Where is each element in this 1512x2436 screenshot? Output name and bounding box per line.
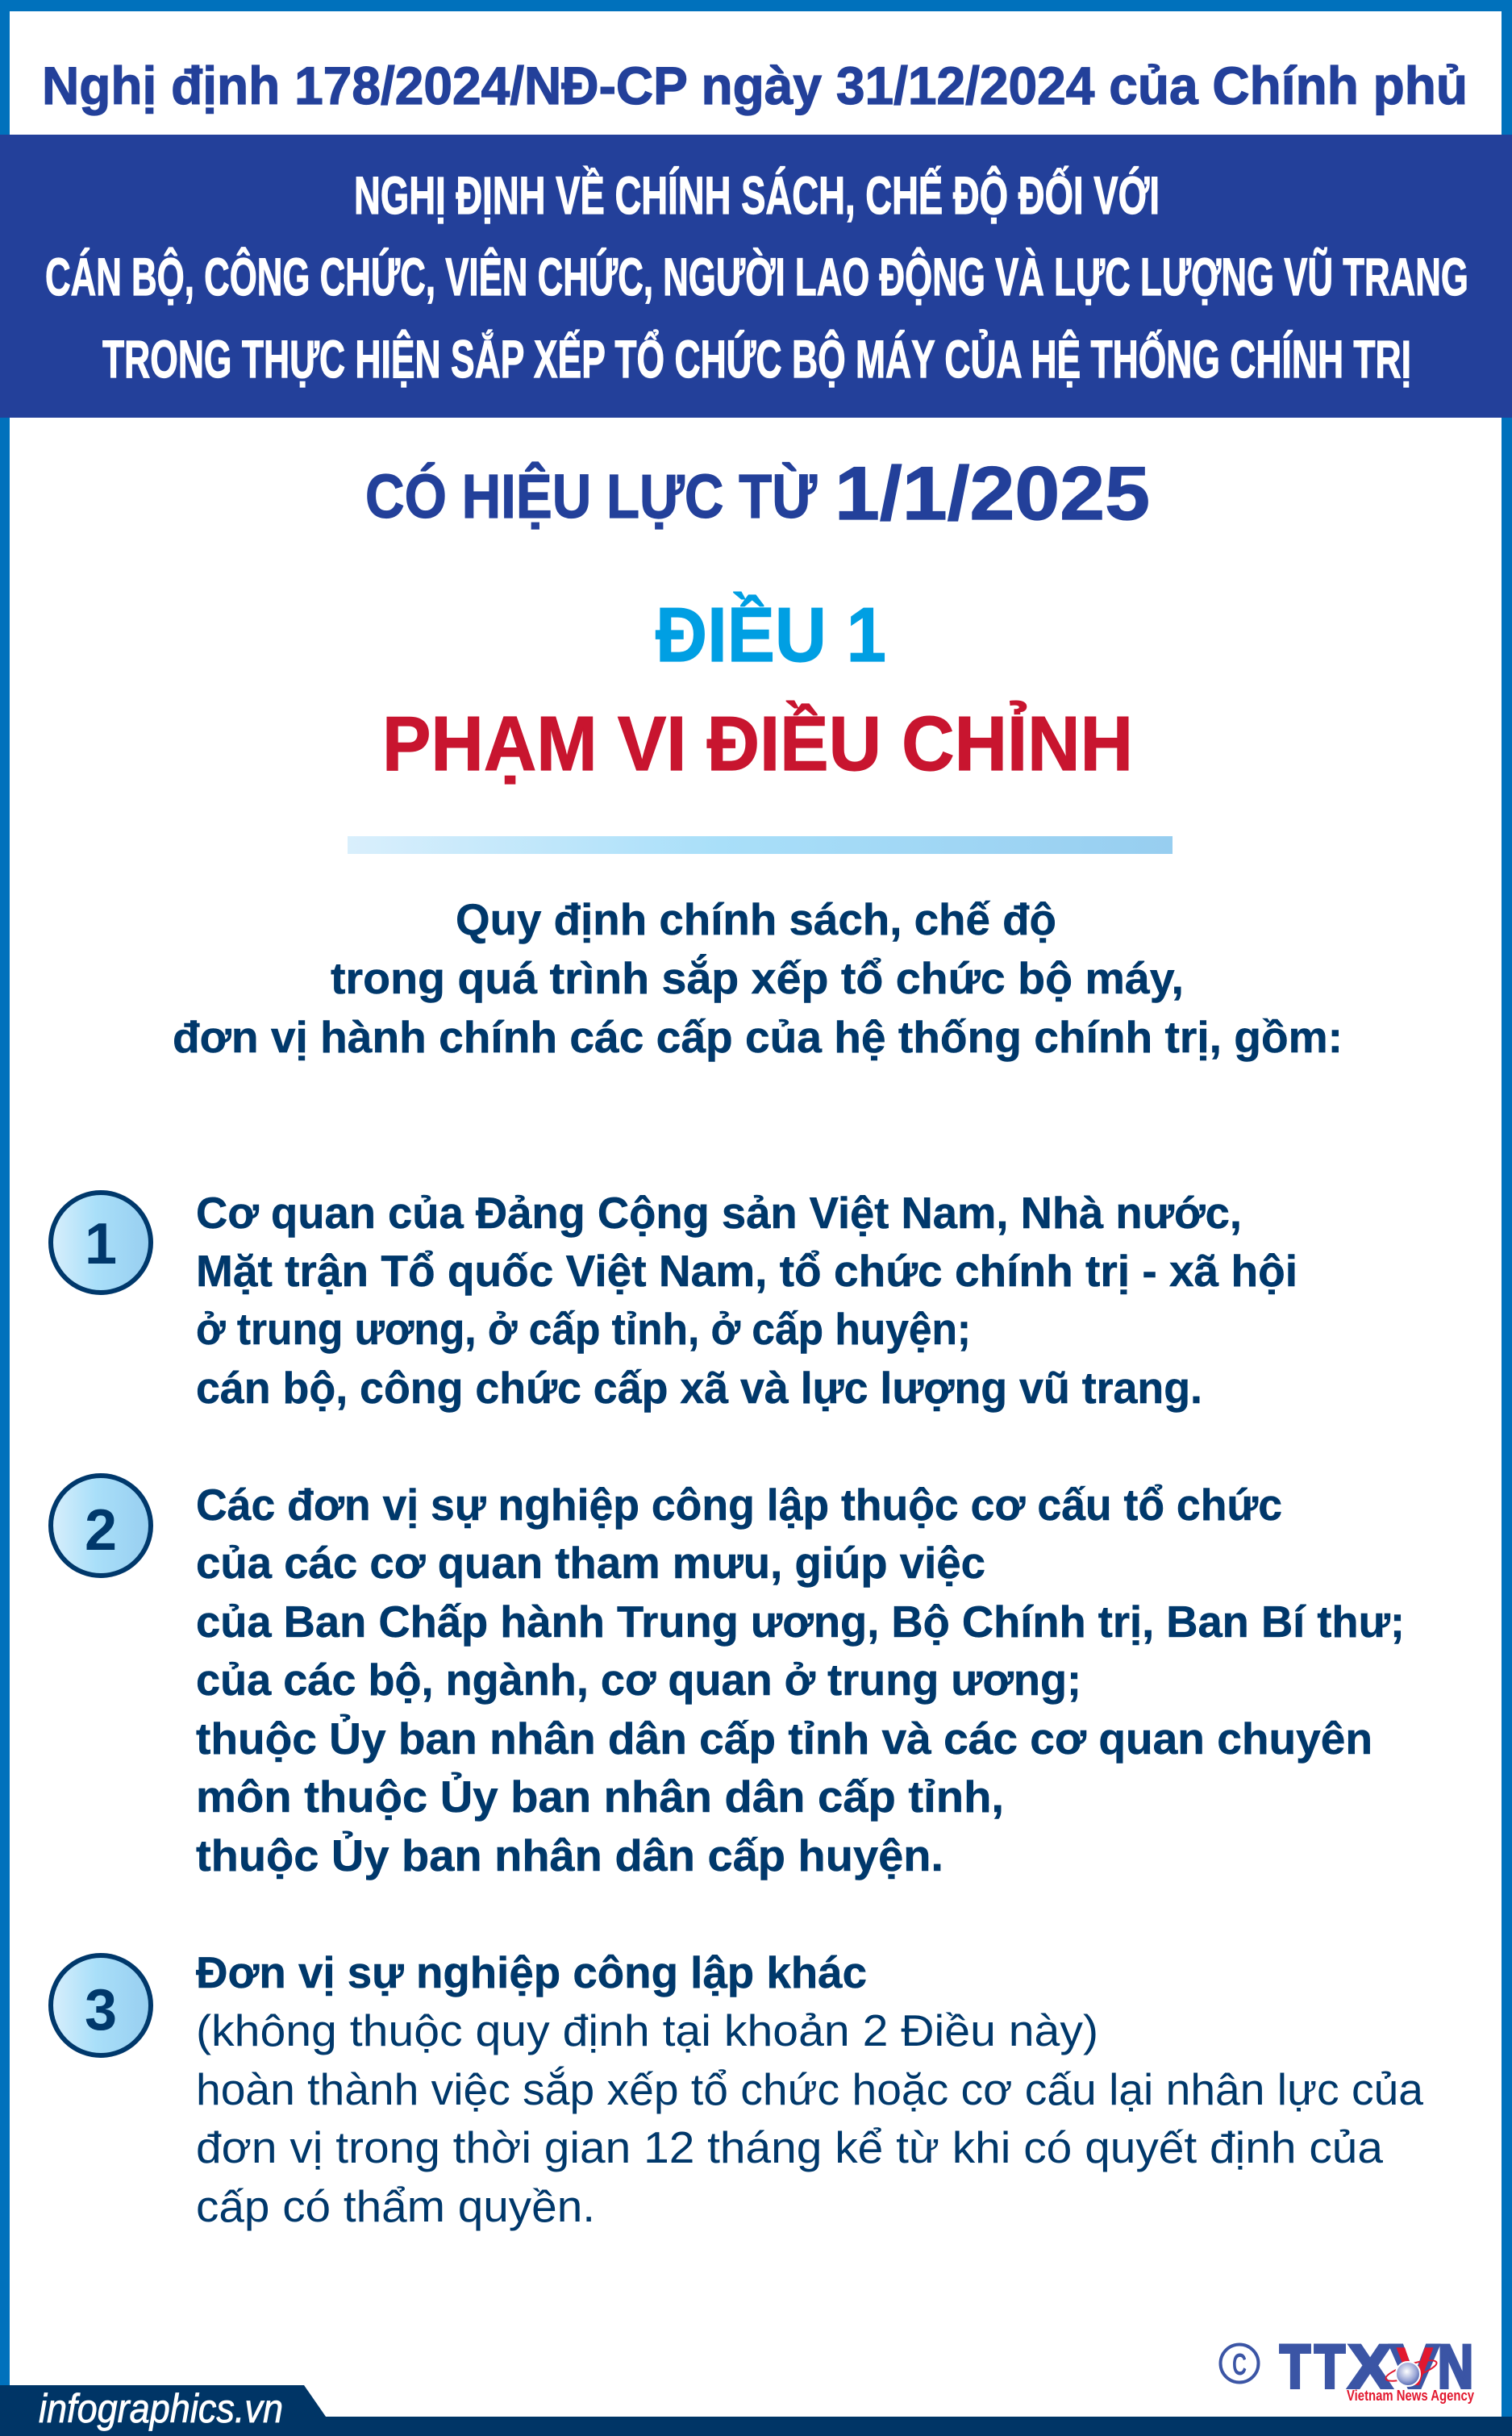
item 1 text: Mặt trận Tổ quốc Việt Nam, tổ chức chính trị - xã hội bbox=[196, 1246, 1297, 1296]
number badge 3: 3 bbox=[85, 1978, 117, 2042]
number badge 2: 2 bbox=[85, 1498, 117, 1563]
article heading: PHẠM VI ĐIỀU CHỈNH bbox=[382, 700, 1133, 787]
number badge 1 bbox=[51, 1193, 151, 1293]
intro text: Quy định chính sách, chế độ bbox=[456, 894, 1056, 944]
item 2 text: môn thuộc Ủy ban nhân dân cấp tỉnh, bbox=[196, 1772, 1004, 1822]
icon: copyright: C bbox=[1232, 2348, 1247, 2382]
item 2 text: Các đơn vị sự nghiệp công lập thuộc cơ cấu tổ chức bbox=[196, 1480, 1282, 1530]
item 1 text bbox=[196, 1188, 1297, 1413]
intro text bbox=[173, 894, 1343, 1062]
site name: infographics.vn bbox=[39, 2386, 283, 2431]
logo: TTXVN: Vietnam News Agency bbox=[1347, 2388, 1474, 2404]
item 1 bbox=[51, 1188, 1297, 1413]
number badge 1: 1 bbox=[85, 1212, 117, 1276]
number badge 3 bbox=[51, 1955, 151, 2055]
item 2 text: của các bộ, ngành, cơ quan ở trung ương; bbox=[196, 1655, 1081, 1705]
item 2 text: thuộc Ủy ban nhân dân cấp huyện. bbox=[196, 1830, 943, 1880]
logo: TTXVN: N bbox=[1438, 2333, 1473, 2401]
item 3 bbox=[51, 1947, 1423, 2231]
effective date bbox=[365, 451, 1150, 535]
effective date: 1/1/2025 bbox=[835, 451, 1150, 535]
icon: copyright bbox=[1221, 2345, 1258, 2382]
item 1 text: cán bộ, công chức cấp xã và lực lượng vũ trang. bbox=[196, 1363, 1202, 1413]
logo: TTXVN: X bbox=[1348, 2333, 1392, 2401]
effective date: CÓ HIỆU LỰC TỪ bbox=[365, 461, 817, 531]
item 2 bbox=[51, 1476, 1405, 1880]
item 3 text: Đơn vị sự nghiệp công lập khác bbox=[196, 1947, 867, 1997]
logo: TTXVN: T bbox=[1314, 2333, 1345, 2401]
logo: TTXVN: V bbox=[1396, 2336, 1434, 2397]
item 2 text: của các cơ quan tham mưu, giúp việc bbox=[196, 1538, 985, 1588]
title: decree reference: Nghị định 178/2024/NĐ-CP ngày 31/12/2024 của Chính phủ bbox=[42, 56, 1468, 115]
item 3 text: (không thuộc quy định tại khoản 2 Điều này) bbox=[196, 2005, 1098, 2055]
header band bbox=[0, 135, 1512, 418]
header band: NGHỊ ĐỊNH VỀ CHÍNH SÁCH, CHẾ ĐỘ ĐỐI VỚI bbox=[354, 165, 1160, 225]
item 2 text: của Ban Chấp hành Trung ương, Bộ Chính trị, Ban Bí thư; bbox=[196, 1597, 1405, 1647]
item 2 text: thuộc Ủy ban nhân dân cấp tỉnh và các cơ quan chuyên bbox=[196, 1714, 1372, 1763]
intro text: đơn vị hành chính các cấp của hệ thống chính trị, gồm: bbox=[173, 1012, 1343, 1062]
item 3 text: cấp có thẩm quyền. bbox=[196, 2181, 595, 2231]
logo: TTXVN bbox=[1280, 2333, 1474, 2404]
item 1 text: ở trung ương, ở cấp tỉnh, ở cấp huyện; bbox=[196, 1304, 971, 1354]
item 3 text: hoàn thành việc sắp xếp tổ chức hoặc cơ cấu lại nhân lực của bbox=[196, 2064, 1423, 2114]
article number: ĐIỀU 1 bbox=[656, 591, 886, 678]
footer bar with site tab bbox=[0, 2385, 1512, 2436]
item 3 text: đơn vị trong thời gian 12 tháng kể từ khi có quyết định của bbox=[196, 2122, 1383, 2172]
logo: TTXVN: T bbox=[1280, 2333, 1310, 2401]
item 2 text bbox=[196, 1480, 1405, 1880]
intro text: trong quá trình sắp xếp tổ chức bộ máy, bbox=[331, 953, 1184, 1003]
gradient rule bbox=[348, 836, 1173, 854]
logo: TTXVN: V bbox=[1390, 2333, 1439, 2401]
item 3 text bbox=[196, 1947, 1423, 2231]
item 1 text: Cơ quan của Đảng Cộng sản Việt Nam, Nhà nước, bbox=[196, 1188, 1242, 1238]
number badge 2 bbox=[51, 1476, 151, 1576]
